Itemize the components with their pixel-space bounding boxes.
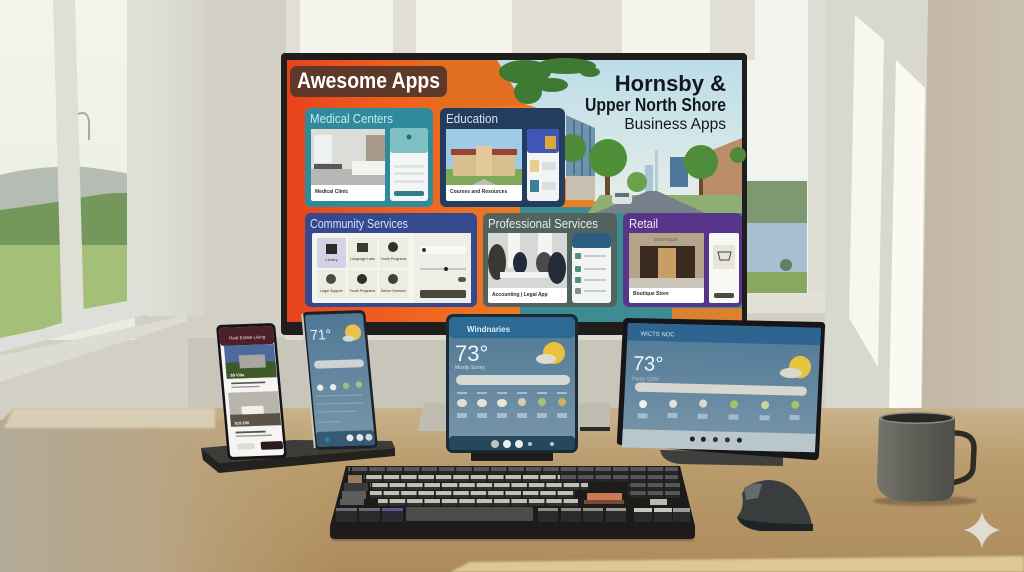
wall below monitor — [188, 338, 820, 410]
keys row 1 — [348, 467, 678, 475]
tile: Youth Programs — [379, 238, 408, 268]
desk top — [0, 408, 1024, 572]
header bar — [449, 317, 575, 338]
device screen — [449, 317, 575, 450]
temperature: 73° — [455, 341, 488, 366]
far right tree — [730, 147, 746, 163]
room wall — [0, 0, 1024, 420]
tablet screen — [622, 323, 821, 452]
centre tree — [589, 139, 627, 200]
bottom dock — [449, 436, 575, 450]
secondary button — [237, 443, 255, 450]
base top — [201, 440, 395, 463]
water — [744, 223, 807, 273]
bottom row right keys — [538, 508, 626, 522]
forecast marks — [637, 411, 800, 422]
right window sky — [740, 60, 814, 294]
school photo — [446, 129, 522, 201]
wall beyond window — [825, 0, 928, 410]
mouse wheel highlight — [744, 484, 762, 500]
house photo — [224, 344, 277, 379]
meeting label: Accounting | Legal App — [492, 292, 548, 298]
dock — [316, 430, 375, 447]
sky above monitor — [755, 0, 814, 60]
card background — [305, 108, 433, 207]
panel: Retail — [623, 213, 742, 307]
keyboard — [330, 466, 695, 541]
select control — [420, 246, 466, 254]
phone: real estate — [216, 323, 287, 460]
interior photo — [228, 391, 281, 427]
card title: Professional Services — [488, 216, 598, 231]
education app — [527, 129, 559, 201]
window frame band — [286, 0, 826, 60]
blue building — [670, 157, 688, 187]
badge: Awesome Apps — [290, 66, 447, 97]
sunlight patch 2 — [889, 60, 925, 408]
top tree canopy — [499, 58, 600, 104]
town scene — [497, 58, 746, 213]
header text: Real Estate Living — [229, 334, 266, 341]
riser edge — [580, 427, 610, 431]
window handle — [78, 113, 89, 140]
mouse — [737, 480, 813, 531]
house price: $9 Villa — [230, 372, 245, 378]
school label: Courses and Resources — [450, 189, 507, 195]
weather icons — [316, 381, 363, 391]
keys row 2 — [348, 475, 678, 483]
tile: Youth Programs 2 — [348, 270, 377, 298]
phone body — [216, 323, 287, 460]
bottom teal strip — [520, 207, 742, 322]
clinic label: Medical Clinic — [315, 189, 349, 195]
card background — [440, 108, 565, 207]
meeting photo — [488, 233, 567, 303]
right wall — [922, 0, 1024, 410]
tile: Language Labs: Language Labs — [350, 257, 375, 261]
forecast lines — [316, 394, 364, 423]
bottom row left keys — [336, 508, 403, 522]
card background — [623, 213, 742, 307]
dark orange shape — [420, 60, 525, 108]
storefront photo: BOUTIQUE — [654, 237, 678, 242]
badge text: Awesome Apps — [297, 68, 440, 93]
store label: Boutique Store — [633, 291, 669, 297]
phone: weather — [301, 310, 378, 450]
sun — [536, 342, 565, 364]
search bar — [635, 382, 807, 396]
stand: tablet — [660, 450, 783, 466]
monitor bezel — [281, 53, 747, 335]
sun — [341, 324, 362, 342]
tile: Legal Support: Legal Support — [320, 289, 343, 293]
glass building base — [566, 176, 595, 200]
river bank — [744, 272, 807, 293]
right buildings — [700, 138, 742, 196]
tile: Youth Programs 2: Youth Programs — [350, 289, 376, 293]
phone screen — [219, 326, 284, 457]
app name: WICTS NOC — [640, 332, 675, 338]
glass building lines — [574, 120, 590, 176]
left tree behind card — [558, 134, 586, 162]
keys row 5 — [340, 499, 667, 507]
distant tower 2 — [655, 150, 658, 193]
stand: foldable — [471, 451, 553, 461]
tablet body — [617, 318, 825, 460]
phone screen — [305, 313, 375, 447]
tile: Youth Programs: Youth Programs — [381, 257, 407, 261]
heading: Business Apps: Business Apps — [624, 116, 726, 133]
distant towers — [645, 165, 653, 193]
distant hills — [0, 167, 130, 240]
action button — [261, 441, 283, 450]
left window sky — [0, 0, 135, 340]
grey riser behind foldable — [418, 403, 610, 431]
pane 1 — [300, 0, 393, 60]
mouse base — [737, 517, 813, 531]
tile: Language Labs — [348, 238, 377, 268]
green hills — [0, 193, 130, 250]
mug handle — [950, 433, 974, 483]
forecast marks — [457, 392, 567, 418]
device body — [446, 314, 578, 453]
professional app — [572, 233, 611, 303]
glass building — [566, 115, 595, 200]
field — [0, 245, 130, 342]
tree line — [744, 181, 807, 223]
base front — [201, 448, 395, 473]
ledge below monitor — [285, 335, 625, 340]
card title: Community Services — [310, 216, 408, 231]
bottom dock — [622, 429, 816, 452]
arrow keys — [634, 508, 690, 522]
desk left shade — [0, 420, 340, 572]
mouse body — [737, 480, 813, 531]
heading: Upper North Shore: Upper North Shore — [585, 95, 726, 115]
heading: Hornsby: Hornsby & — [615, 71, 726, 96]
interior price: $19 200 — [235, 420, 250, 426]
keys row 4 — [342, 491, 680, 499]
right tree — [684, 145, 718, 197]
panel: Education — [440, 108, 565, 207]
desk — [0, 408, 1024, 572]
tile: Legal Support — [317, 270, 346, 298]
clinic photo — [311, 129, 385, 201]
services app — [312, 233, 471, 303]
panel: Community Services — [305, 213, 477, 307]
road — [595, 191, 705, 213]
listing text — [231, 382, 266, 388]
keyboard shadow — [332, 536, 694, 541]
window frame bottom — [0, 297, 148, 352]
mug shadow — [873, 496, 977, 506]
stand: phones base — [201, 440, 395, 473]
sunlight patch 1 — [849, 15, 884, 367]
subtitle: Mostly Sunny — [455, 365, 486, 371]
phone silver edge — [301, 314, 316, 448]
weather icons — [457, 398, 566, 407]
retail app — [709, 233, 739, 303]
toggle — [458, 277, 466, 282]
subtitle: Partly /1000 — [632, 376, 659, 383]
sparkle watermark — [964, 512, 1000, 548]
desk glare lower — [450, 556, 1024, 572]
small tree — [627, 172, 647, 192]
app name: Windnaries — [467, 325, 511, 334]
button — [420, 290, 466, 298]
panel: Professional Services — [483, 213, 617, 307]
badge background — [290, 66, 447, 97]
keyboard body — [330, 466, 695, 539]
search bar — [456, 375, 570, 385]
search bar — [314, 359, 364, 369]
sill — [744, 293, 830, 313]
pane 2 — [416, 0, 512, 60]
sun — [780, 355, 812, 379]
card background — [305, 213, 477, 307]
window sill — [0, 315, 187, 382]
frame — [808, 0, 826, 312]
bottom right orange — [672, 308, 742, 322]
card background — [483, 213, 617, 307]
orange background — [287, 60, 742, 322]
card title: Medical Centers — [310, 111, 393, 126]
orange key lower — [584, 500, 624, 504]
clinic app — [390, 128, 428, 201]
header bar — [627, 323, 821, 345]
window frame right — [127, 0, 147, 310]
desk glare top — [4, 408, 215, 428]
upper centre windows — [286, 0, 826, 60]
window reveal — [147, 0, 205, 316]
riser body — [418, 403, 610, 431]
tile: Library — [317, 238, 346, 268]
car — [612, 192, 632, 204]
tablet: weather — [617, 318, 825, 460]
panel: Medical Centers — [305, 108, 433, 207]
foldable device: weather — [446, 314, 578, 453]
river tree — [780, 259, 792, 271]
scene sky — [497, 60, 742, 213]
window frame vertical — [53, 0, 84, 328]
pane 3 — [622, 0, 710, 60]
space bar — [406, 507, 533, 521]
orange key — [587, 493, 622, 500]
second listing text — [236, 430, 272, 437]
mug body — [877, 418, 955, 502]
screen background — [622, 323, 821, 452]
ground — [588, 195, 742, 213]
card title: Education — [446, 111, 498, 126]
monitor screen — [287, 58, 746, 322]
keys row 3 — [344, 483, 680, 491]
temperature: 71° — [309, 326, 332, 343]
right window — [740, 0, 928, 410]
left window — [0, 0, 205, 382]
phone body — [302, 310, 378, 450]
temperature: 73° — [632, 353, 664, 376]
header — [219, 326, 274, 346]
tile: Library: Library — [325, 257, 338, 262]
mug rim — [879, 412, 955, 424]
monitor — [281, 53, 747, 335]
card title: Retail — [629, 216, 658, 231]
tile: Senior Services: Senior Services — [381, 289, 406, 293]
slider — [420, 267, 466, 271]
mug inside — [882, 414, 952, 422]
weather icons — [639, 397, 799, 412]
tile: Senior Services — [379, 270, 408, 298]
coffee mug — [873, 412, 977, 506]
